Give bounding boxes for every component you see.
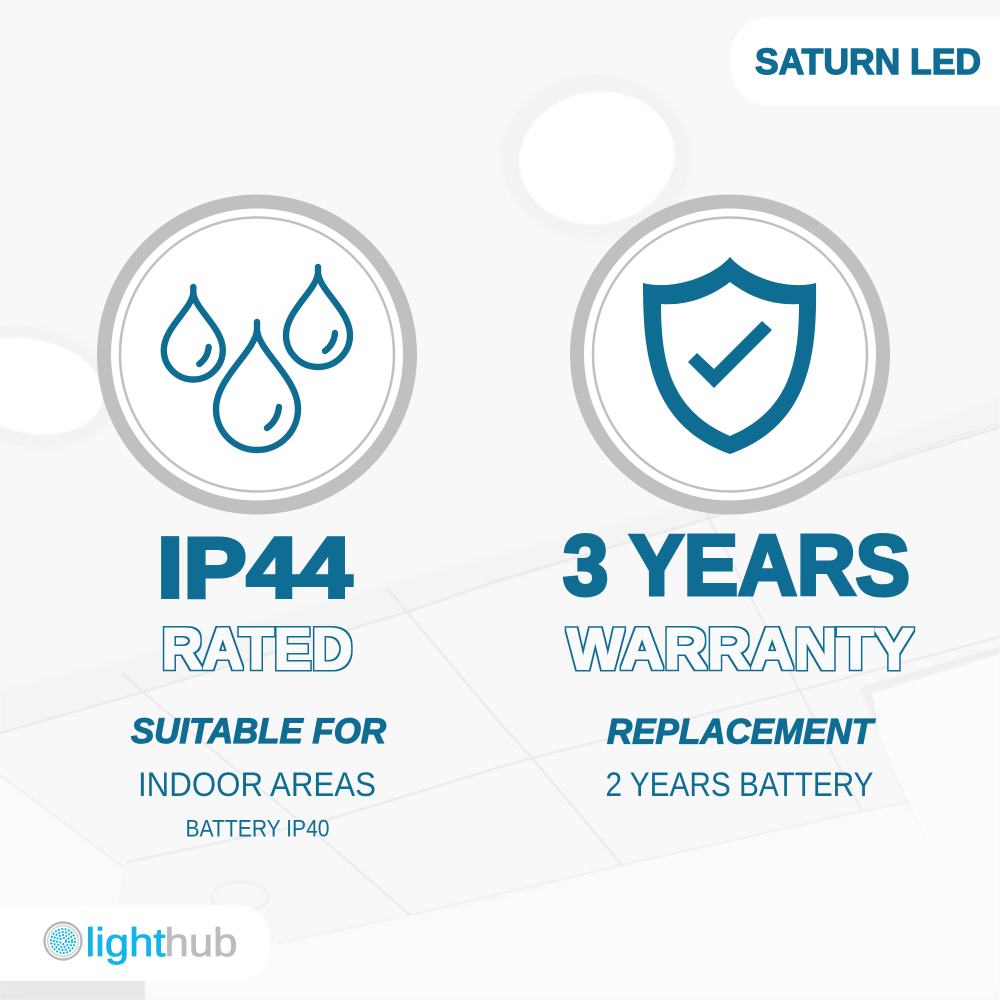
text: suitable for: SUITABLE FOR: [131, 712, 387, 751]
panel: warranty badge circle with shield: [570, 194, 890, 514]
logo wordmark: light: [86, 921, 166, 965]
badge: lighthub logo: [0, 905, 270, 981]
text: indoor areas: INDOOR AREAS: [138, 766, 376, 804]
heading: WARRANTY outline: WARRANTY: [567, 617, 914, 682]
badge: product name: [730, 17, 1000, 106]
text: 2 years battery: 2 YEARS BATTERY: [606, 766, 874, 804]
heading: IP44: IP44: [157, 521, 352, 616]
heading: 3 YEARS: 3 YEARS: [563, 518, 910, 614]
panel: IP44 badge circle with water drops: [97, 194, 417, 514]
text: battery IP40: BATTERY IP40: [186, 816, 330, 842]
text: replacement: REPLACEMENT: [607, 712, 876, 752]
product name text: SATURN LED: [755, 41, 981, 82]
heading: RATED outline: RATED: [162, 617, 352, 682]
icon: lighthub logo mark: [44, 922, 82, 960]
icon: shield with check mark: [643, 257, 816, 454]
icon: water drops: [164, 267, 350, 450]
logo wordmark: hub: [164, 921, 238, 965]
